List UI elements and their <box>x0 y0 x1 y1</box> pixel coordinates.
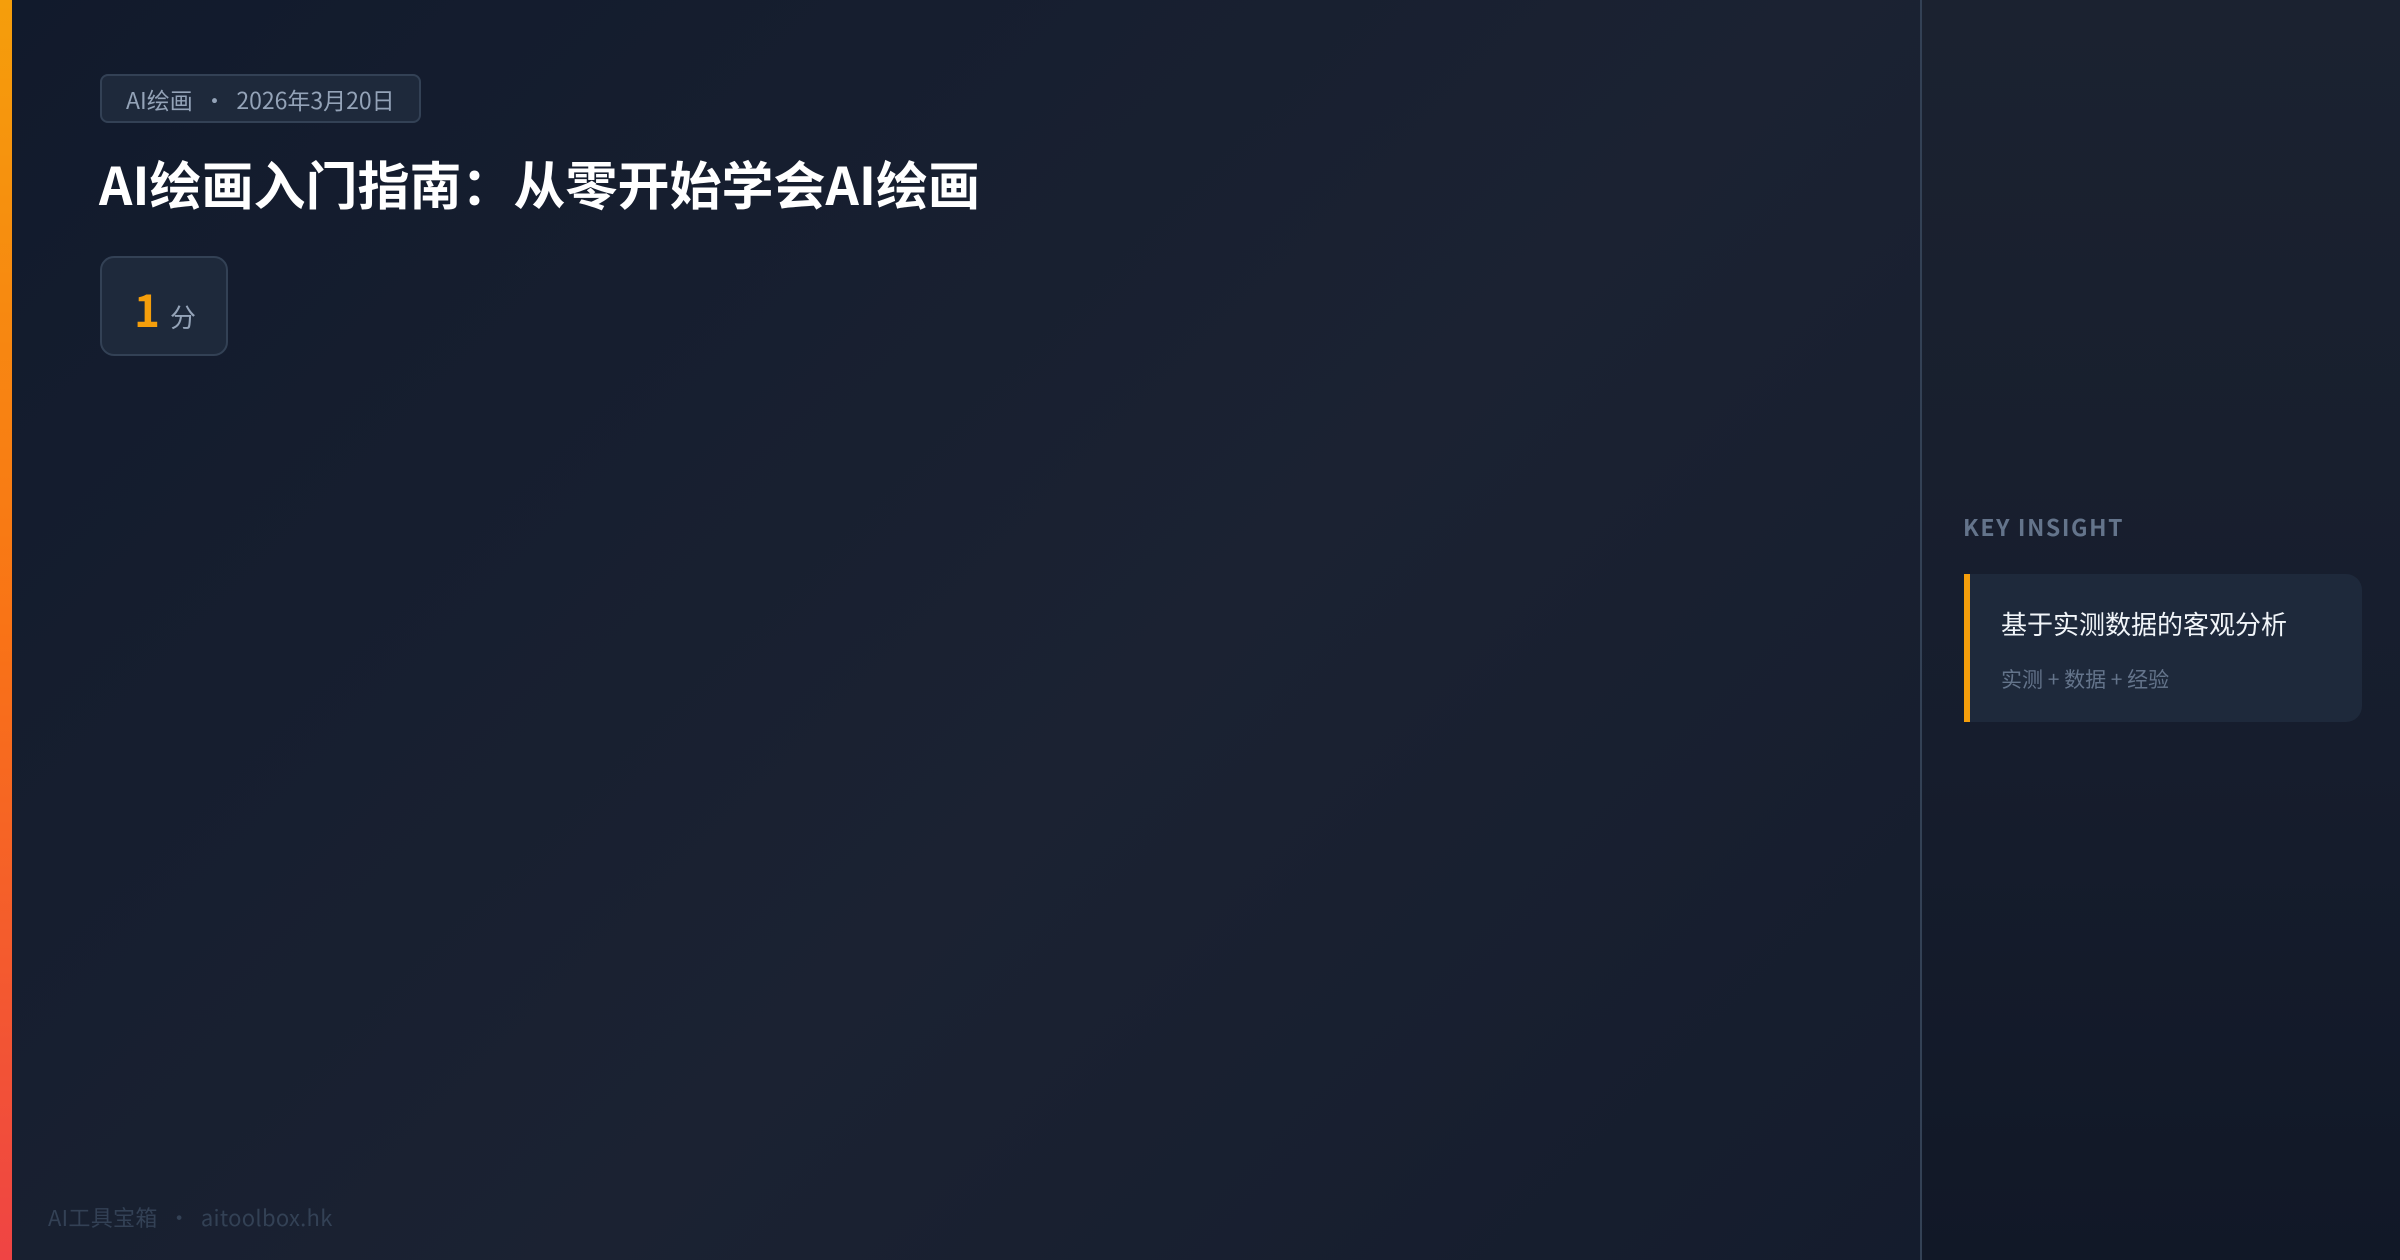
accent bar <box>0 0 12 1260</box>
badge: score: 1 分 <box>134 276 196 340</box>
badge: score <box>100 256 228 356</box>
right panel <box>1920 0 2400 1260</box>
card main text: 基于实测数据的客观分析 <box>2001 605 2287 642</box>
footer: AI工具宝箱 · aitoolbox.hk <box>48 1201 333 1233</box>
tag: category and date: AI绘画 · 2026年3月20日 <box>126 82 395 116</box>
insight card <box>1964 574 2362 722</box>
card sub text: 实测 + 数据 + 经验 <box>2001 664 2169 694</box>
title: AI绘画入门指南：从零开始学会AI绘画 <box>99 145 980 220</box>
heading: key insight: KEY INSIGHT <box>1963 509 2124 543</box>
tag: category and date <box>100 74 421 123</box>
